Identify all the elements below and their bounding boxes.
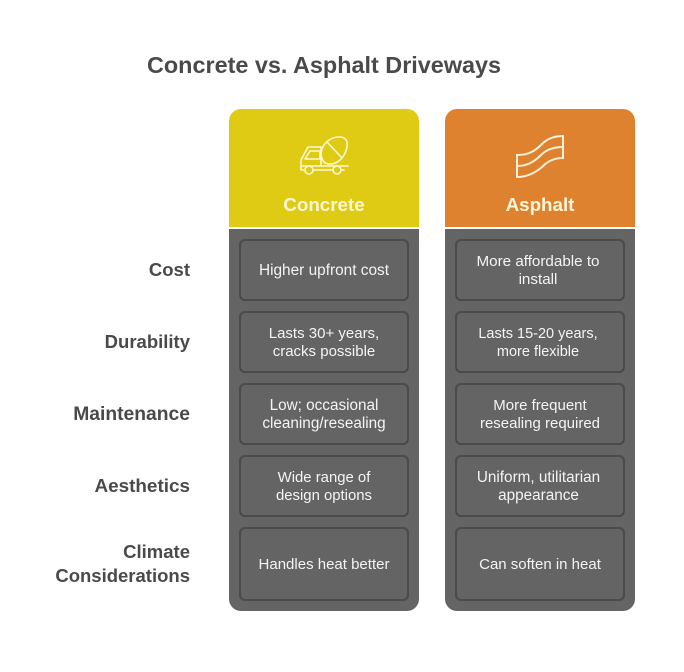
cell: asphalt aesthetics: appearance: [498, 486, 579, 504]
cell: concrete cost: [239, 239, 409, 301]
cell: asphalt maintenance: More frequent: [493, 396, 587, 414]
row label: durability: Durability: [105, 331, 190, 352]
cell: concrete climate: Handles heat better: [259, 556, 389, 572]
cell: asphalt cost: install: [519, 270, 557, 288]
header label: concrete: Concrete: [283, 194, 365, 215]
cell: concrete durability: Lasts 30+ years,: [269, 324, 379, 342]
icon: road strip: [516, 135, 564, 178]
cell: concrete aesthetics: [239, 455, 409, 517]
panel: asphalt values: [445, 229, 635, 611]
cell: asphalt cost: More affordable to: [476, 252, 599, 270]
cell: asphalt cost: [455, 239, 625, 301]
cell: asphalt climate: Can soften in heat: [479, 556, 601, 572]
title: Concrete vs. Asphalt Driveways: [147, 52, 501, 78]
cell: asphalt maintenance: resealing required: [480, 414, 600, 432]
icon: cement mixer truck: [300, 136, 349, 175]
cell: asphalt durability: Lasts 15-20 years,: [478, 326, 598, 342]
cell: concrete aesthetics: Wide range of: [278, 470, 370, 486]
row label: aesthetics: Aesthetics: [94, 476, 190, 497]
cell: asphalt maintenance: [455, 383, 625, 445]
panel: concrete values: [229, 229, 419, 611]
header label: asphalt: Asphalt: [506, 194, 574, 215]
cell: concrete climate: [239, 527, 409, 601]
row label: climate considerations: [55, 541, 190, 586]
cell: concrete maintenance: cleaning/resealing: [262, 414, 386, 432]
cell: asphalt durability: [455, 311, 625, 373]
cell: concrete aesthetics: design options: [276, 488, 372, 504]
cell: concrete durability: [239, 311, 409, 373]
cell: asphalt durability: more flexible: [497, 344, 579, 360]
cell: asphalt aesthetics: [455, 455, 625, 517]
row label: climate considerations: Considerations: [55, 565, 190, 586]
cell: concrete durability: cracks possible: [273, 342, 375, 360]
row label: climate considerations: Climate: [123, 541, 190, 562]
cell: asphalt aesthetics: Uniform, utilitarian: [477, 468, 600, 486]
header: asphalt: [445, 109, 635, 227]
row label: maintenance: Maintenance: [73, 404, 190, 425]
row label: cost: Cost: [149, 259, 190, 280]
cell: concrete maintenance: Low; occasional: [270, 396, 378, 414]
cell: asphalt climate: [455, 527, 625, 601]
cell: concrete maintenance: [239, 383, 409, 445]
cell: concrete cost: Higher upfront cost: [259, 262, 389, 278]
header: concrete: [229, 109, 419, 227]
